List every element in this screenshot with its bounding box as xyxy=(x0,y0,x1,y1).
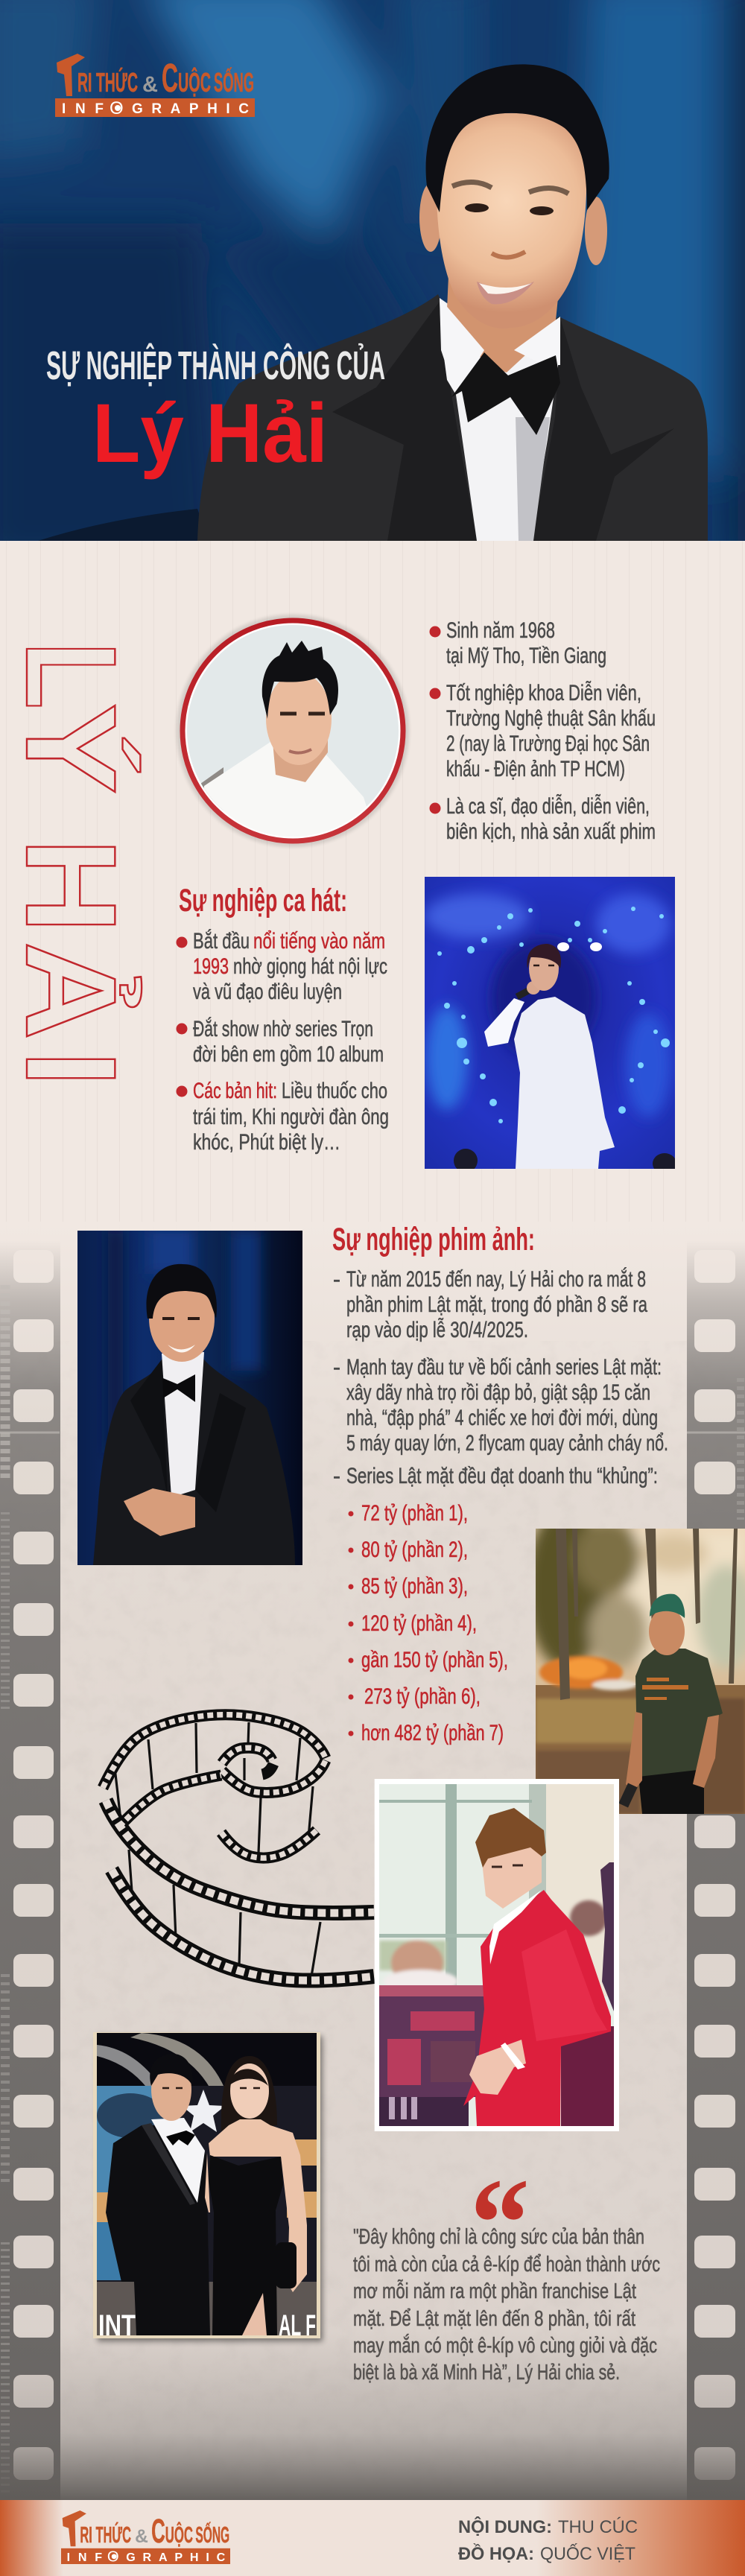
bio bullets: Trường Nghệ thuật Sân khấu xyxy=(446,706,656,731)
heading: film career: Sự nghiệp phim ảnh: xyxy=(332,1222,535,1257)
quote text xyxy=(353,2225,660,2385)
footer logo: UỘC xyxy=(165,2521,193,2548)
photo: field with fire xyxy=(525,1505,745,1814)
hero portrait: features xyxy=(452,182,568,304)
vertical outline name: I xyxy=(0,1050,142,1087)
quote text: mặt. Để Lật mặt lên đến 8 phần, tôi rất xyxy=(353,2307,635,2331)
singing bullets: 1993 xyxy=(193,954,229,979)
quote text: "Đây không chỉ là công sức của bản thân xyxy=(353,2225,644,2249)
circular portrait xyxy=(177,615,410,849)
photo: couple xyxy=(93,2032,323,2342)
logo: Tri thức & Cuộc sống: GRAPHIC xyxy=(132,101,249,117)
photo: concert xyxy=(425,877,676,1174)
hero title: SỰ NGHIỆP THÀNH CÔNG CỦA xyxy=(46,343,385,388)
icon: film reel xyxy=(103,1715,374,1981)
bio bullets: biên kịch, nhà sản xuất phim xyxy=(446,819,656,844)
box office list: 273 tỷ (phần 6), xyxy=(364,1684,481,1709)
film career paragraphs: - xyxy=(333,1464,340,1488)
film career paragraphs: rạp vào dịp lễ 30/4/2025. xyxy=(346,1318,528,1342)
bio bullets xyxy=(429,618,656,844)
singing bullets: Bắt đầu xyxy=(193,929,250,954)
quote text: biệt là bà xã Minh Hà”, Lý Hải chia sẻ. xyxy=(353,2361,620,2385)
footer logo: & xyxy=(135,2526,148,2547)
film strip: left xyxy=(0,1240,60,2500)
footer logo: O xyxy=(107,2549,119,2566)
bio bullets: khấu - Điện ảnh TP HCM) xyxy=(446,757,625,781)
singing bullets: Các bản hit: xyxy=(193,1079,277,1103)
photo: red jacket xyxy=(375,1779,619,2131)
footer credits: ĐỒ HỌA: xyxy=(458,2543,534,2564)
singing bullets: Đắt show nhờ series Trọn xyxy=(193,1017,373,1041)
logo: Tri thức & Cuộc sống: & xyxy=(142,72,158,97)
hero name: Lý Hải xyxy=(92,387,328,480)
hero panel xyxy=(0,0,745,566)
box office list: gần 150 tỷ (phần 5), xyxy=(361,1648,508,1672)
singing bullets: Liều thuốc cho xyxy=(282,1079,387,1103)
heading: singing career: Sự nghiệp ca hát: xyxy=(179,883,347,919)
film career paragraphs: - xyxy=(333,1267,340,1292)
bio bullets: 2 (nay là Trường Đại học Sân xyxy=(446,732,650,756)
vertical outline name: Ý xyxy=(0,703,142,794)
singing bullets: nhờ giọng hát nội lực xyxy=(233,954,387,979)
footer logo: SỐNG xyxy=(195,2521,229,2548)
singer xyxy=(484,944,615,1169)
footer logo: GRAPHIC xyxy=(126,2551,226,2564)
hero portrait: face xyxy=(437,113,587,305)
footer xyxy=(0,2500,745,2576)
film strip: right xyxy=(687,1240,745,2500)
film career paragraphs: - xyxy=(333,1355,340,1380)
footer logo: INF xyxy=(67,2551,102,2564)
footer logo: C xyxy=(151,2512,165,2550)
singing bullets xyxy=(176,929,389,1155)
box office list xyxy=(349,1501,508,1745)
footer credits: THU CÚC xyxy=(558,2517,638,2537)
hero portrait: collar xyxy=(440,298,560,395)
hero portrait: bow tie xyxy=(451,352,560,435)
hero portrait: shirt xyxy=(440,298,560,541)
logo: Tri thức & Cuộc sống: RI THỨC xyxy=(77,66,138,98)
photo: tuxedo portrait xyxy=(77,1229,302,1565)
footer credits: QUỐC VIỆT xyxy=(540,2543,635,2564)
film career paragraphs: phần phim Lật mặt, trong đó phần 8 sẽ ra xyxy=(346,1292,647,1317)
bio bullets: tại Mỹ Tho, Tiền Giang xyxy=(446,644,606,668)
footer credits xyxy=(458,2516,638,2564)
bio bullets: Là ca sĩ, đạo diễn, diễn viên, xyxy=(446,794,650,819)
logo: Tri thức & Cuộc sống: INF xyxy=(62,101,104,117)
logo: Tri thức & Cuộc sống: UỘC xyxy=(178,66,211,98)
hero portrait: chair xyxy=(38,509,209,541)
footer logo xyxy=(61,2510,230,2566)
photo: couple: INT xyxy=(98,2309,136,2342)
logo: Tri thức & Cuộc sống xyxy=(55,54,255,118)
singing bullets: nổi tiếng vào năm xyxy=(253,929,385,954)
box office list: 85 tỷ (phần 3), xyxy=(361,1574,468,1599)
hero portrait: tuxedo xyxy=(197,294,708,541)
vertical outline name: L xyxy=(0,641,142,709)
icon: quotation mark: “ xyxy=(470,2153,530,2294)
singing bullets: khóc, Phút biệt ly… xyxy=(193,1130,340,1155)
photo: couple: AL F xyxy=(279,2309,316,2342)
singing bullets: đời bên em gồm 10 album xyxy=(193,1042,384,1067)
singing bullets: và vũ đạo điêu luyện xyxy=(193,980,342,1004)
bio bullets: Sinh năm 1968 xyxy=(446,618,555,643)
box office list: 120 tỷ (phần 4), xyxy=(361,1611,477,1636)
bio bullets: Tốt nghiệp khoa Diễn viên, xyxy=(446,681,641,705)
hero portrait: hair xyxy=(426,64,609,212)
page background paper xyxy=(0,541,745,2576)
box office list: 72 tỷ (phần 1), xyxy=(361,1501,468,1526)
logo: Tri thức & Cuộc sống: SỐNG xyxy=(214,66,254,98)
vertical outline name xyxy=(0,641,142,1087)
footer credits: NỘI DUNG: xyxy=(458,2516,552,2537)
vertical outline name: H xyxy=(0,838,142,933)
logo: Tri thức & Cuộc sống: O xyxy=(110,98,124,118)
box office list: hơn 482 tỷ (phần 7) xyxy=(361,1721,504,1745)
quote text: mơ mỗi năm ra một phần franchise Lật xyxy=(353,2279,636,2303)
singing bullets: trái tim, Khi người đàn ông xyxy=(193,1105,389,1129)
hero portrait: lapels xyxy=(332,302,674,541)
box office list: 80 tỷ (phần 2), xyxy=(361,1538,468,1562)
logo: Tri thức & Cuộc sống: C xyxy=(162,56,178,101)
hero portrait: neck xyxy=(447,276,560,372)
film career paragraphs xyxy=(333,1267,668,1488)
vertical outline name: Ả xyxy=(0,942,142,1040)
hero portrait: ears xyxy=(419,183,607,265)
footer logo: RI THỨC xyxy=(80,2521,131,2548)
